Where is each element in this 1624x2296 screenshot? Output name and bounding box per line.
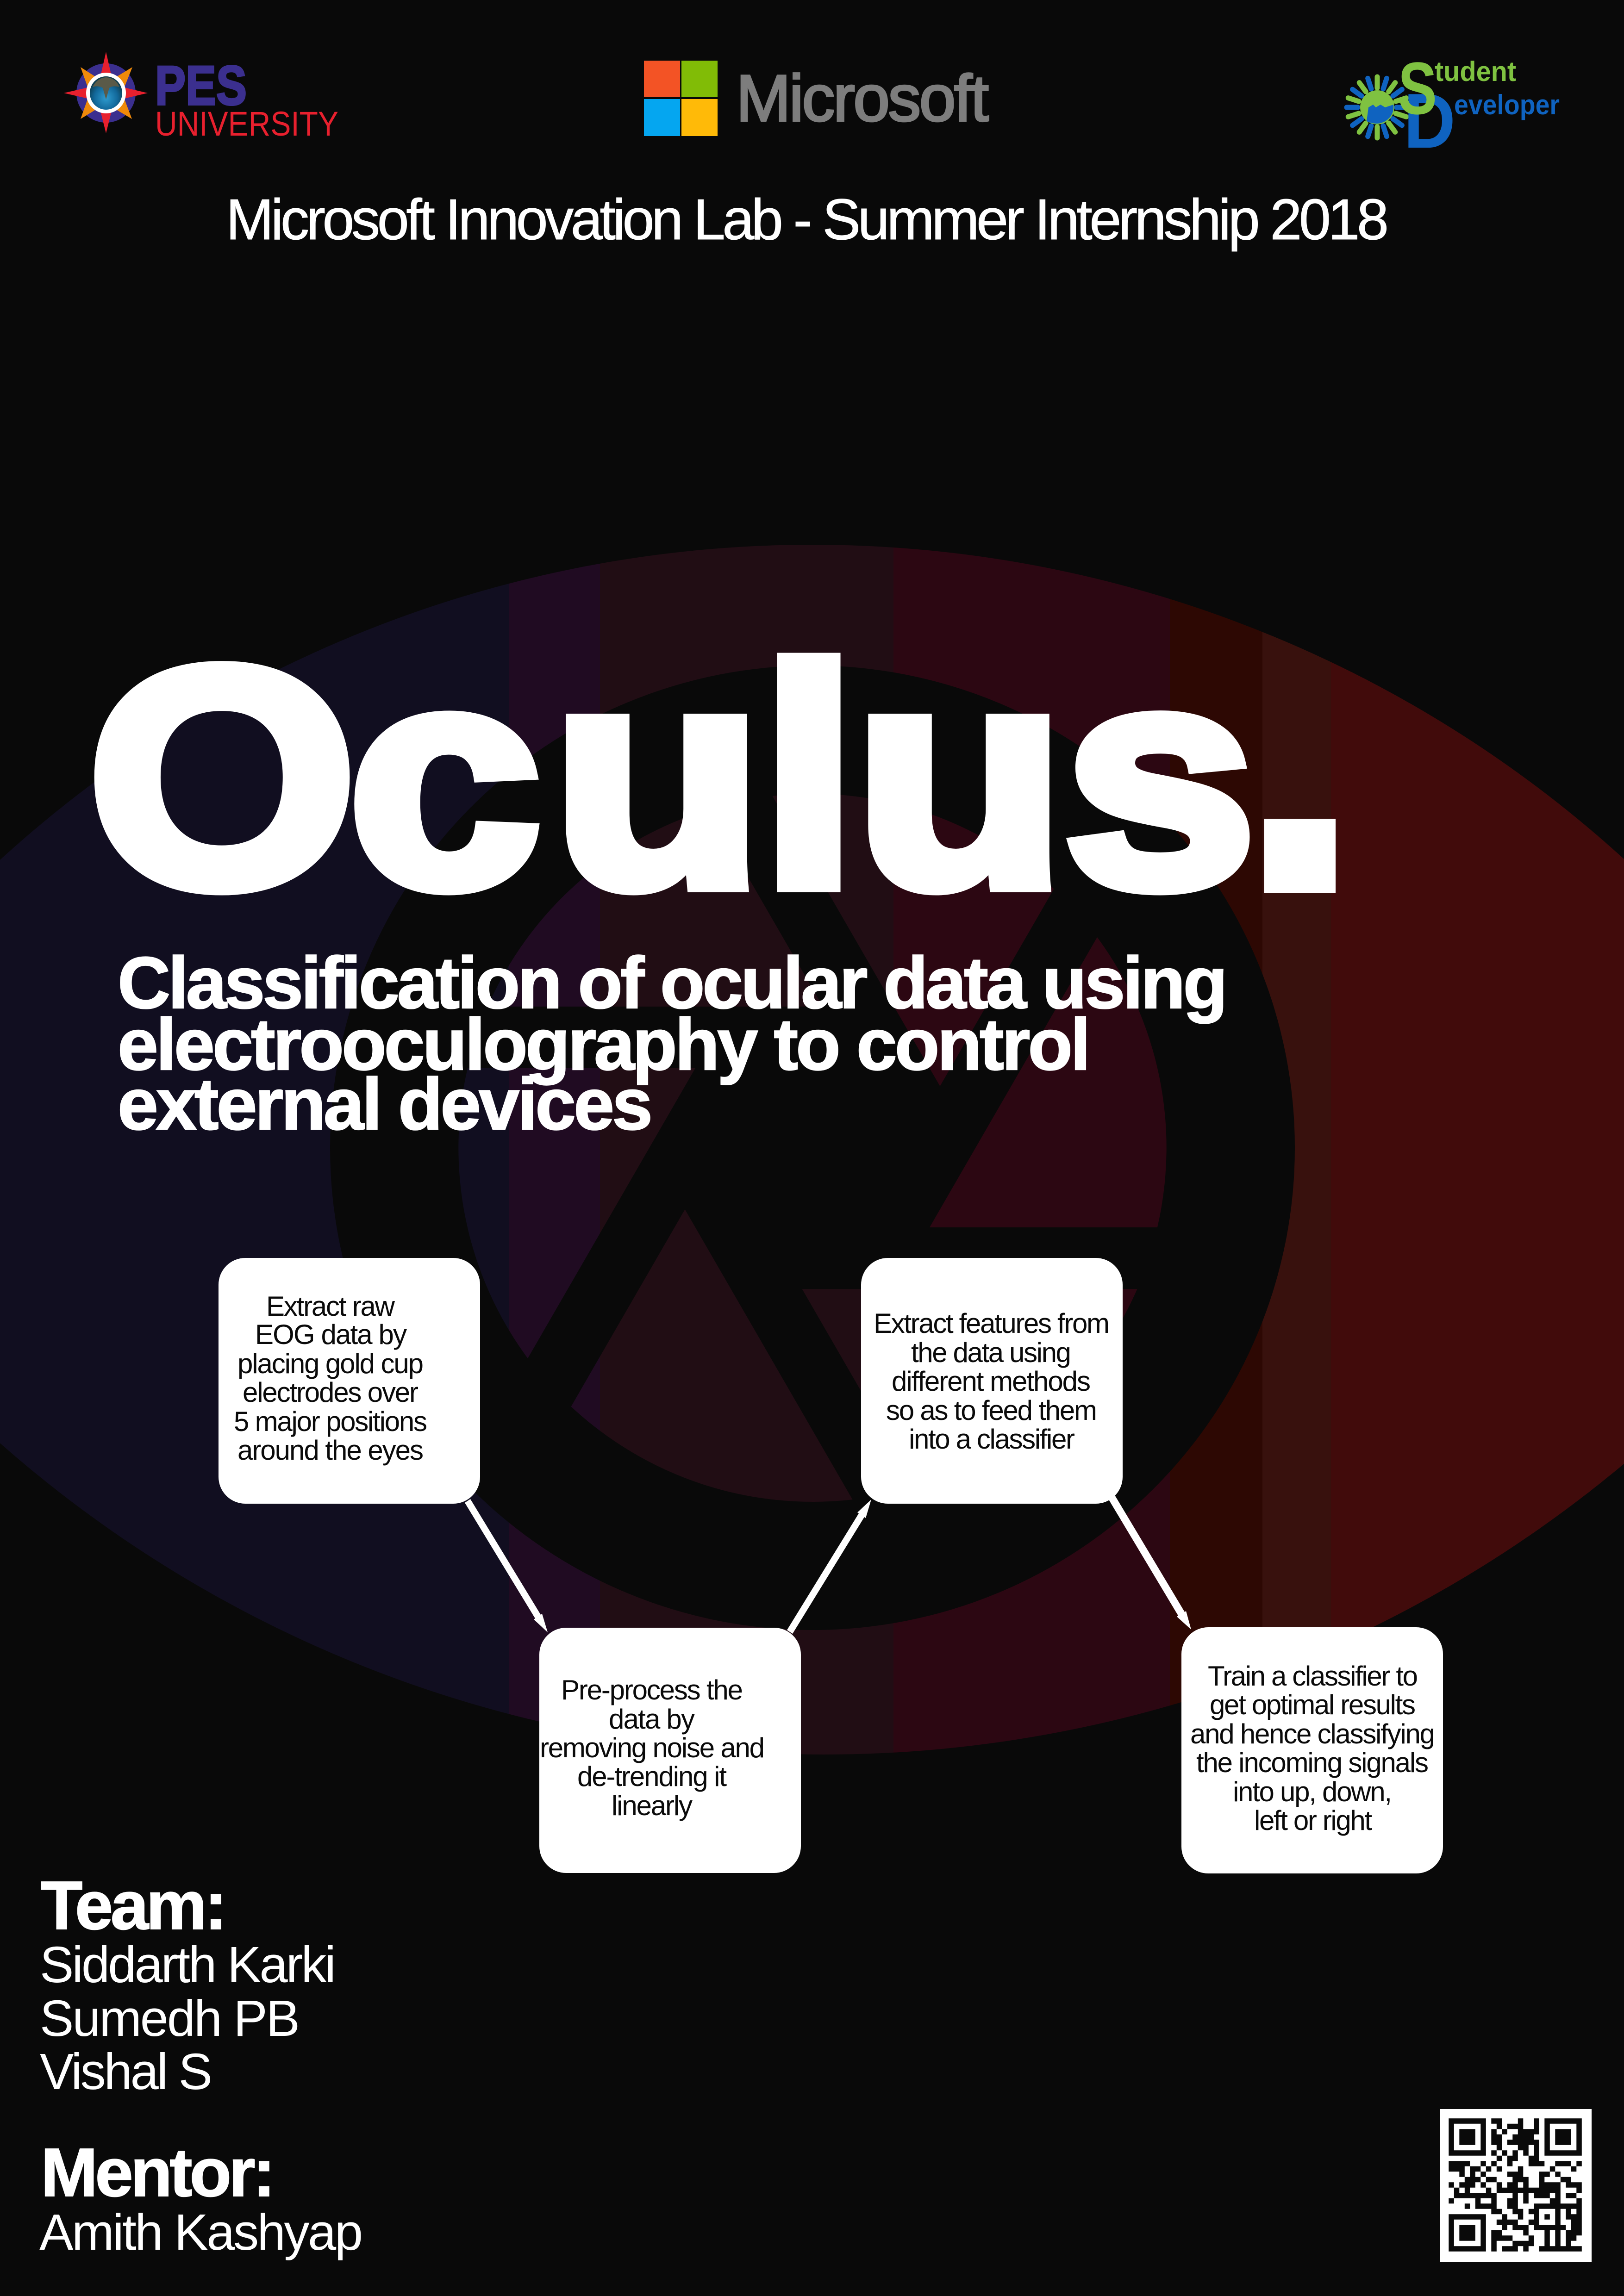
team names: Siddarth Karki [40,1936,336,1993]
step 4 text: left or right [1254,1805,1372,1836]
title: Oculus: Oculus [88,604,1255,951]
step 1 text: EOG data by [255,1319,407,1350]
text: Microsoft: Microsoft [736,62,989,135]
step 1 text: 5 major positions [234,1406,427,1437]
subtitle: external devices [118,1064,653,1145]
logo: PES University [64,52,338,143]
QR code [1440,2109,1592,2262]
step 4 text: get optimal results [1210,1689,1416,1720]
text: tudent: tudent [1435,56,1516,87]
team names: Vishal S [40,2043,212,2100]
mentor name: Amith Kashyap [39,2204,363,2261]
text: eveloper: eveloper [1454,89,1560,120]
step 3 text: the data using [911,1337,1071,1368]
step 2 text [540,1674,765,1821]
arrow: step 3 to step 4 [1108,1494,1191,1630]
subtitle: electrooculography to control [118,1004,1091,1085]
icon: PES emblem [64,52,148,133]
step 2 text: linearly [612,1790,693,1821]
step 1 text: Extract raw [266,1291,395,1322]
logo: Student Developer [1347,47,1560,164]
step 4 text: into up, down, [1233,1776,1392,1807]
step 4 text: Train a classifier to [1208,1661,1418,1692]
logo: Microsoft [644,61,989,136]
arrow: step 1 to step 2 [465,1499,548,1632]
team block [40,1867,336,2100]
text: PES: PES [155,55,247,117]
team names [40,1936,336,2100]
text: S: S [1398,47,1437,130]
subtitle: Classification of ocular data using [118,942,1228,1024]
step 1 text: around the eyes [237,1435,424,1466]
eye sclera colour bands [0,509,1624,1805]
panel: step 1 extract raw data [219,1258,480,1504]
heading: Mentor: Mentor: [41,2134,275,2211]
step 1 text: placing gold cup [237,1348,424,1379]
icon: Microsoft squares [644,61,718,136]
iris aperture blades [458,795,1167,1502]
icon: sun with rays [1347,77,1408,138]
heading: internship line: Microsoft Innovation Lab - Summer Internship 2018 [226,188,1389,252]
step 3 text: different methods [892,1366,1091,1397]
text: D: D [1404,77,1455,164]
step 3 text: into a classifier [909,1424,1075,1455]
panel: step 4 train classifier [1181,1627,1443,1873]
panel: step 3 extract features [861,1258,1123,1504]
step 3 text: so as to feed them [886,1395,1097,1426]
step 4 text [1190,1661,1435,1836]
panel: step 2 pre-process [539,1628,801,1873]
eye background graphic [0,509,1624,1805]
step 2 text: Pre-process the [561,1674,743,1705]
step 2 text: data by [609,1704,695,1735]
step 1 text: electrodes over [243,1377,418,1408]
title: Oculus: . [1257,598,1343,945]
step 3 text: Extract features from [874,1308,1110,1339]
text: UNIVERSITY: UNIVERSITY [155,105,338,143]
mentor block [39,2134,363,2261]
step 4 text: and hence classifying [1190,1718,1435,1749]
subtitle [118,942,1228,1145]
step 4 text: the incoming signals [1196,1747,1429,1778]
arrow: step 2 to step 3 [787,1500,871,1634]
step 2 text: de-trending it [577,1761,727,1792]
team names: Sumedh PB [40,1990,300,2047]
step 3 text [874,1308,1110,1455]
step 2 text: removing noise and [540,1732,765,1763]
step 1 text [234,1291,427,1466]
iris dark disc [330,666,1295,1630]
heading: Team: Team: [41,1867,227,1944]
